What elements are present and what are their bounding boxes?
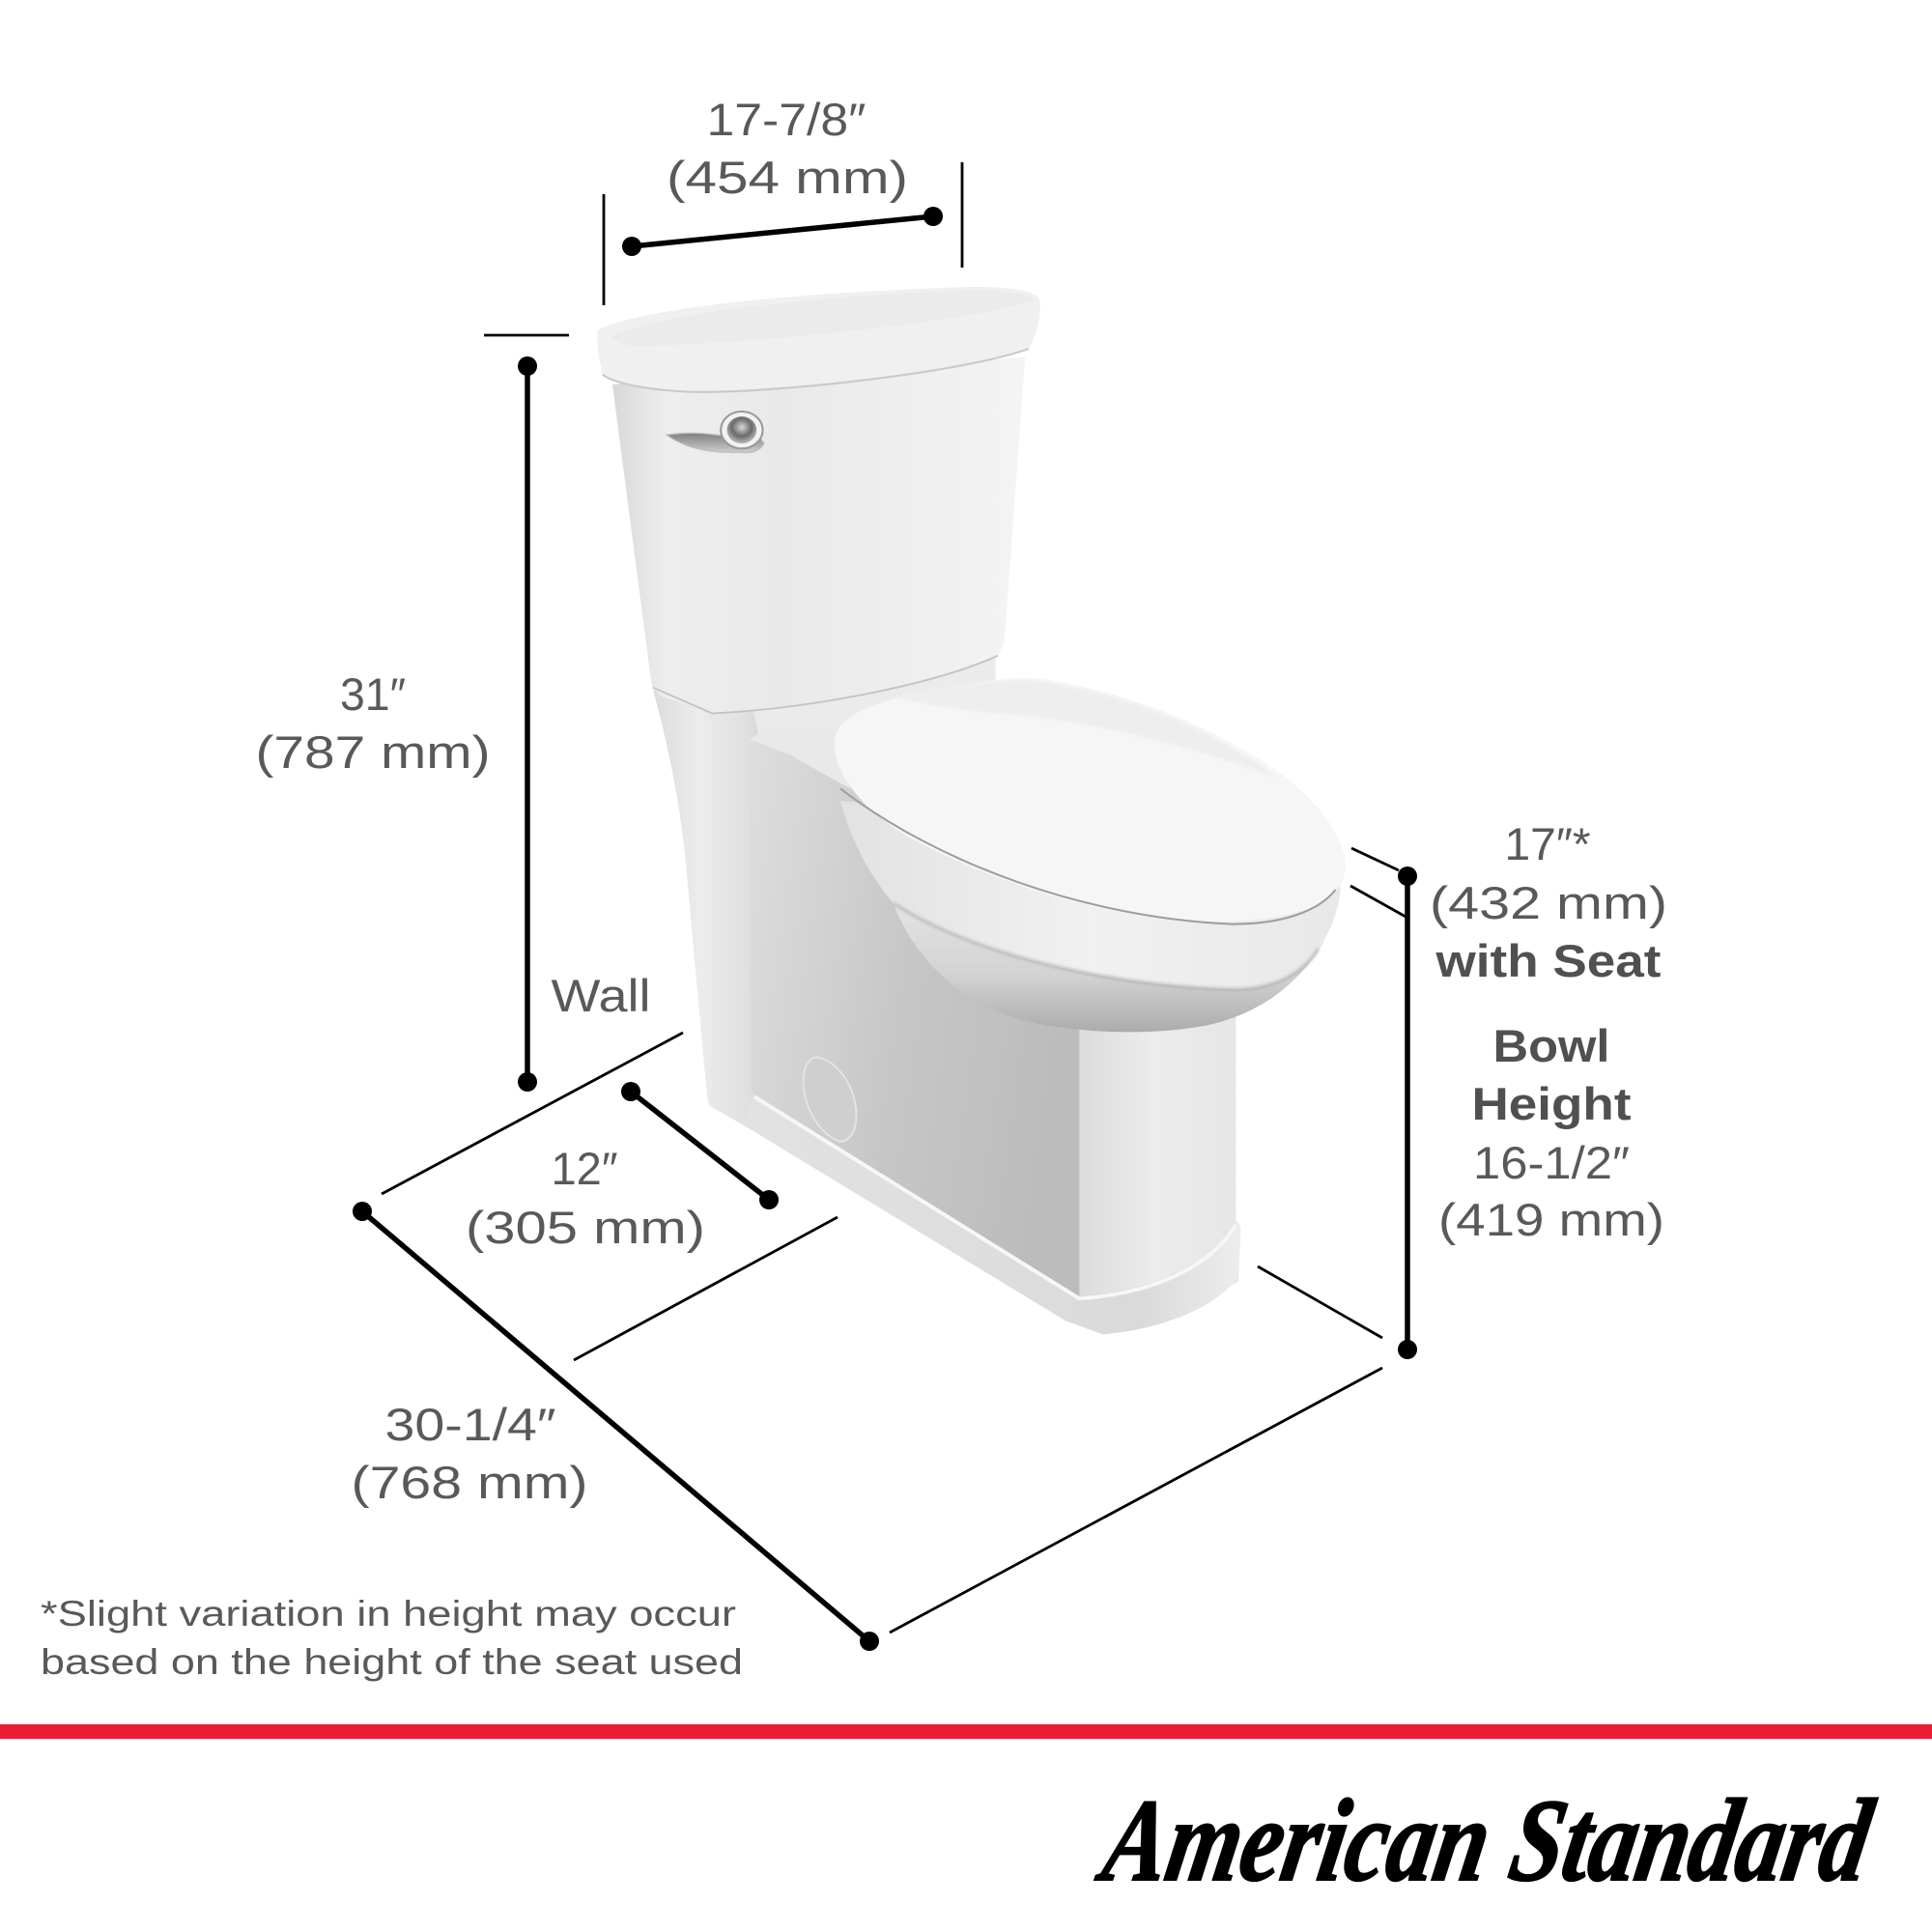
handle knob	[721, 412, 763, 448]
base band edge line	[754, 1096, 1236, 1298]
handle knob chrome	[727, 416, 756, 443]
bowl ridge	[894, 903, 1319, 989]
seat gap line	[840, 788, 1336, 924]
tank body	[612, 357, 1025, 714]
footnote	[41, 1594, 743, 1682]
label: bowl height	[1438, 1020, 1664, 1245]
label: bowl height: Bowl	[1493, 1020, 1609, 1071]
label: rough-in	[466, 1143, 705, 1253]
toilet pedestal side panel	[750, 737, 1084, 1309]
footnote: based on the height of the seat used	[41, 1642, 743, 1682]
bowl lower section	[890, 894, 1323, 1032]
toilet illustration	[597, 287, 1346, 1334]
tank lid top recess	[612, 291, 1035, 346]
label: overall height: 31″	[340, 668, 406, 720]
footnote: *Slight variation in height may occur	[41, 1594, 736, 1634]
label: overall height	[255, 668, 491, 778]
floor guide lines	[890, 1266, 1382, 1633]
toilet pedestal rear column	[653, 690, 770, 1125]
lid edge line	[603, 349, 1029, 392]
dimension: bowl height	[1350, 848, 1417, 1359]
label: overall depth	[352, 1399, 587, 1508]
label: bowl height: (419 mm)	[1438, 1194, 1664, 1245]
dimension: tank width	[604, 162, 962, 305]
label: tank width	[667, 94, 908, 203]
bowl upper rim band	[840, 801, 1341, 989]
toilet front panel	[1079, 1016, 1240, 1333]
dimension: rough-in	[621, 1082, 779, 1209]
seat hinge ledge	[750, 727, 850, 788]
label: height with seat: with Seat	[1435, 935, 1662, 986]
label: overall depth: (768 mm)	[352, 1457, 587, 1508]
label: rough-in: (305 mm)	[466, 1202, 705, 1253]
toilet neck under tank	[653, 650, 996, 754]
red divider bar	[0, 1724, 1932, 1739]
dimension: overall depth	[353, 1202, 879, 1651]
label: tank width: (454 mm)	[667, 152, 908, 203]
handle lever	[667, 433, 764, 453]
tank base shadow line	[653, 656, 998, 714]
tank lid	[597, 287, 1040, 392]
label: height with seat: 17″*	[1505, 818, 1590, 869]
label: wall: Wall	[551, 970, 651, 1021]
label: height with seat: (432 mm)	[1430, 877, 1667, 928]
label: overall depth: 30-1/4″	[384, 1399, 556, 1450]
label: tank width: 17-7/8″	[707, 94, 866, 145]
label: bowl height: 16-1/2″	[1473, 1137, 1630, 1188]
label: height with seat	[1430, 818, 1667, 986]
wall guide lines	[382, 1033, 838, 1360]
drain cover	[804, 1057, 856, 1142]
seat top shading	[894, 681, 1279, 779]
label: bowl height: Height	[1472, 1078, 1632, 1129]
dimension: overall height	[484, 335, 569, 1092]
label: rough-in: 12″	[551, 1143, 618, 1194]
label: overall height: (787 mm)	[255, 726, 491, 778]
toilet base band	[743, 1094, 1240, 1334]
seat and lid	[835, 678, 1346, 922]
flush handle	[667, 412, 764, 453]
